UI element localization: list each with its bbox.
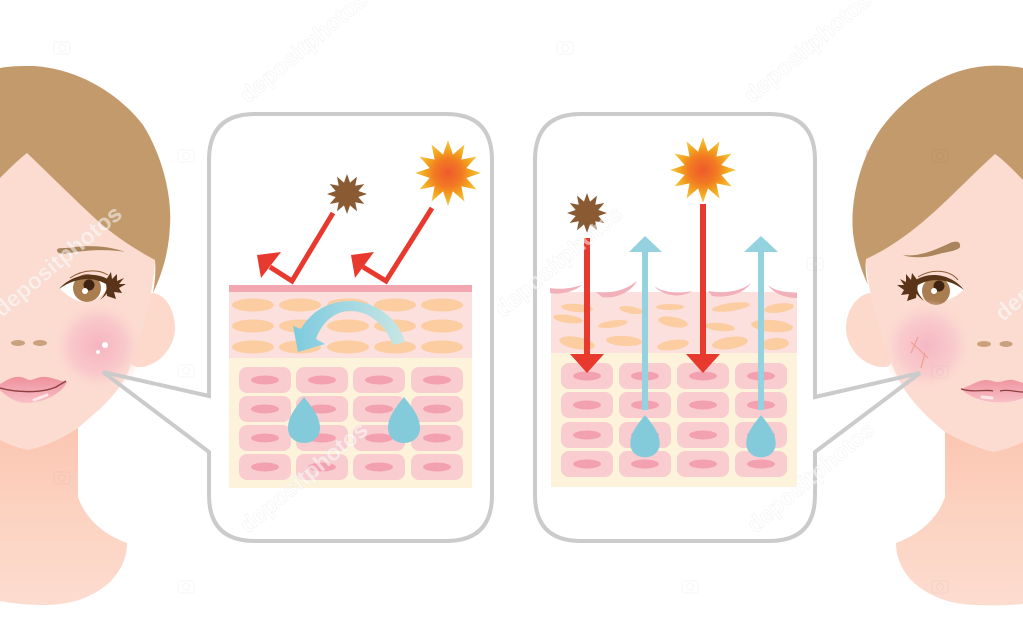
right ear	[846, 293, 892, 367]
left lower skin cells	[239, 367, 463, 480]
left nose	[11, 340, 47, 346]
right skin cross-section	[550, 281, 797, 487]
flaking skin surface	[550, 281, 797, 298]
left hair	[0, 66, 170, 293]
panel: damaged skin speech bubble	[535, 114, 920, 541]
watermark text: depositphotos	[742, 416, 880, 538]
curved moisture arrow	[293, 301, 405, 352]
left neck	[0, 425, 127, 605]
right nose	[977, 341, 1012, 347]
reflected UV arrow 1	[257, 213, 333, 281]
UV arrow penetrating 1	[570, 238, 604, 373]
left skin surface cells	[232, 298, 463, 354]
left eyebrow	[57, 246, 125, 254]
UV arrow penetrating 2	[686, 204, 720, 373]
moisture escaping arrow 1	[629, 236, 662, 410]
sun right panel	[669, 136, 737, 204]
right water drops	[630, 415, 776, 457]
watermark text: depositphotos	[490, 200, 628, 322]
right lower skin cells	[561, 363, 787, 477]
moisture escaping arrow 2	[744, 236, 778, 410]
brown star left panel	[326, 173, 368, 215]
left cheek blush	[51, 299, 145, 393]
right neck	[896, 425, 1023, 605]
left ear	[129, 293, 175, 367]
brown star right panel	[566, 192, 608, 234]
watermark cameras	[54, 42, 948, 593]
right face: damaged skin	[846, 66, 1023, 605]
left face skin	[0, 150, 155, 450]
right lips	[961, 380, 1023, 402]
left eye	[59, 271, 126, 302]
right face skin	[866, 150, 1023, 452]
watermark text: depositphotos	[235, 416, 373, 538]
left water drops	[288, 397, 420, 443]
sun left panel	[414, 139, 482, 207]
right hair	[852, 66, 1023, 285]
left lips	[0, 377, 67, 403]
left cheek pimples	[96, 342, 108, 354]
right cheek blush	[880, 299, 974, 393]
left face: healthy skin	[0, 66, 175, 605]
left bubble outline	[103, 114, 492, 541]
panel: healthy skin speech bubble	[103, 114, 492, 541]
left skin cross-section	[229, 285, 472, 488]
right eye	[897, 271, 964, 305]
right eyebrow	[903, 242, 960, 257]
right bubble outline	[535, 114, 920, 541]
right cheek wrinkles	[911, 337, 928, 368]
reflected UV arrow 2	[351, 208, 432, 281]
disordered surface cells	[553, 300, 794, 352]
